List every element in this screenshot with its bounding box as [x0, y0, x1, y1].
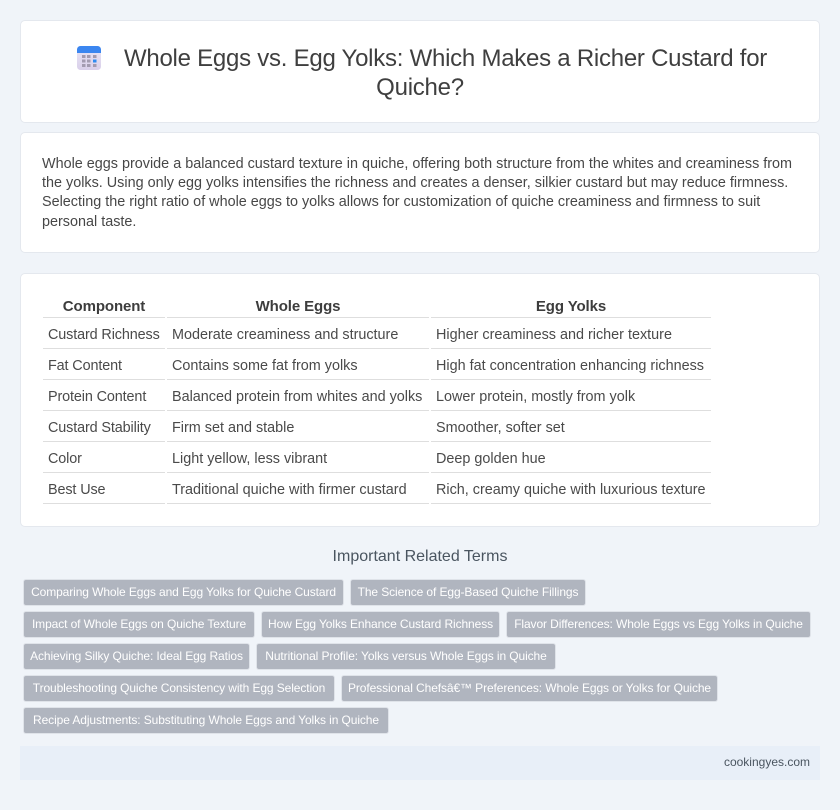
intro paragraph: the yolks. Using only egg yolks intensifies the richness and creates a denser, silkier custard but may reduce firmness. — [42, 175, 788, 191]
comparison table — [43, 298, 711, 504]
related term tags: Nutritional Profile: Yolks versus Whole Eggs in Quiche — [265, 649, 547, 663]
comparison table: High fat concentration enhancing richness — [436, 358, 704, 374]
title card — [20, 20, 820, 123]
related term tags: Professional Chefsâ€™ Preferences: Whole Eggs or Yolks for Quiche — [348, 681, 711, 695]
comparison table: Component — [63, 298, 145, 315]
related term tags: How Egg Yolks Enhance Custard Richness — [268, 617, 493, 631]
related term tags: Troubleshooting Quiche Consistency with Egg Selection — [33, 681, 325, 695]
comparison table: Higher creaminess and richer texture — [436, 327, 672, 343]
title: Whole Eggs vs. Egg Yolks: Which Makes a Richer Custard for — [124, 45, 767, 72]
comparison table panel — [20, 273, 820, 527]
icon: calendar — [77, 46, 101, 70]
intro paragraph — [42, 156, 792, 230]
comparison table: Contains some fat from yolks — [172, 358, 358, 374]
comparison table: Smoother, softer set — [436, 420, 565, 436]
comparison table: Best Use — [48, 482, 105, 498]
intro paragraph: Whole eggs provide a balanced custard texture in quiche, offering both structure from the whites and creaminess from — [42, 156, 792, 172]
comparison table: Protein Content — [48, 389, 146, 405]
comparison table: Moderate creaminess and structure — [172, 327, 398, 343]
comparison table: Lower protein, mostly from yolk — [436, 389, 635, 405]
comparison table: Fat Content — [48, 358, 122, 374]
related term tags: Recipe Adjustments: Substituting Whole Eggs and Yolks in Quiche — [33, 713, 379, 727]
title — [124, 45, 767, 101]
intro paragraph: Selecting the right ratio of whole eggs to yolks allows for customization of quiche creaminess and firmness to suit — [42, 194, 760, 210]
intro paragraph: personal taste. — [42, 214, 136, 230]
related term tags — [23, 579, 811, 734]
footer bar — [20, 746, 820, 780]
related term tags: Achieving Silky Quiche: Ideal Egg Ratios — [30, 649, 243, 663]
comparison table: Whole Eggs — [256, 298, 340, 315]
related term tags: Comparing Whole Eggs and Egg Yolks for Quiche Custard — [31, 585, 336, 599]
comparison table: Custard Stability — [48, 420, 151, 436]
comparison table: Balanced protein from whites and yolks — [172, 389, 422, 405]
comparison table: Rich, creamy quiche with luxurious texture — [436, 482, 706, 498]
comparison table: Custard Richness — [48, 327, 160, 343]
comparison table: Deep golden hue — [436, 451, 546, 467]
comparison table: Egg Yolks — [536, 298, 606, 315]
related term tags: Flavor Differences: Whole Eggs vs Egg Yolks in Quiche — [514, 617, 803, 631]
related term tags: Impact of Whole Eggs on Quiche Texture — [32, 617, 246, 631]
comparison table: Firm set and stable — [172, 420, 294, 436]
comparison table: Color — [48, 451, 82, 467]
intro text panel — [20, 132, 820, 253]
related term tags: The Science of Egg-Based Quiche Fillings — [358, 585, 578, 599]
related terms heading: Important Related Terms — [333, 548, 507, 565]
footer source: cookingyes.com — [724, 755, 810, 769]
comparison table: Light yellow, less vibrant — [172, 451, 327, 467]
comparison table: Traditional quiche with firmer custard — [172, 482, 407, 498]
title: Quiche? — [376, 74, 464, 101]
